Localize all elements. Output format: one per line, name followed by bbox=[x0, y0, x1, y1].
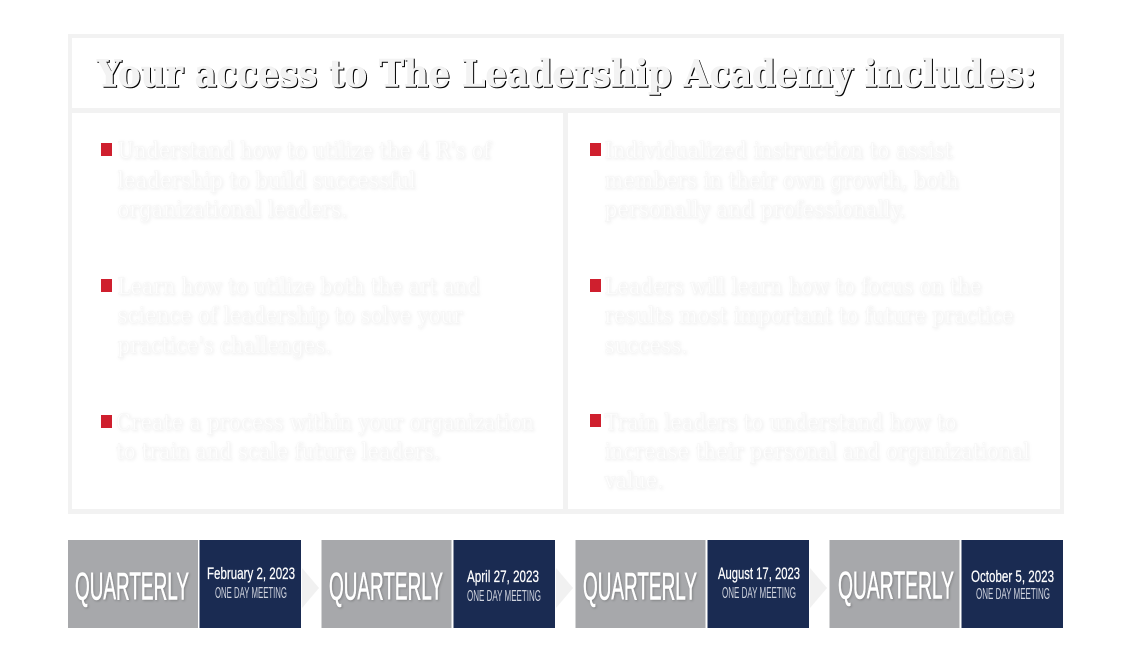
benefit: train and scale bbox=[101, 411, 534, 465]
benefit: individualized instruction bbox=[590, 139, 958, 223]
timeline: October meeting: October 5, 2023 bbox=[971, 568, 1054, 586]
timeline: August meeting: August 17, 2023 bbox=[718, 565, 800, 583]
benefit: art and science: Learn how to utilize both the art and bbox=[118, 275, 480, 300]
timeline: February meeting: February 2, 2023 bbox=[207, 565, 295, 583]
timeline: August meeting: QUARTERLY bbox=[583, 566, 697, 608]
timeline: October meeting bbox=[830, 540, 1063, 628]
benefit: individualized instruction: Individualized instruction to assist bbox=[604, 139, 953, 164]
benefit: increase value: Train leaders to understand how to bbox=[604, 411, 956, 436]
timeline: August meeting: ONE DAY MEETING bbox=[722, 585, 796, 602]
arrow bbox=[556, 568, 573, 608]
timeline: February meeting: QUARTERLY bbox=[75, 566, 189, 608]
benefit: train and scale: Create a process within your organization bbox=[116, 411, 534, 436]
benefit: individualized instruction: personally and professionally. bbox=[604, 198, 906, 223]
benefit: train and scale: to train and scale future leaders. bbox=[116, 440, 440, 465]
timeline: April meeting: ONE DAY MEETING bbox=[467, 588, 541, 605]
benefit: increase value: increase their personal and organizational bbox=[604, 440, 1030, 465]
benefit: art and science: science of leadership to solve your bbox=[118, 304, 463, 329]
benefit: focus on results: Leaders will learn how to focus on the bbox=[604, 275, 982, 300]
panel: right benefits bbox=[590, 139, 1030, 494]
title: Your access to The Leadership Academy includes: bbox=[96, 52, 1036, 96]
content frame bbox=[68, 34, 1064, 514]
benefit: art and science: practice's challenges. bbox=[118, 334, 332, 359]
timeline: February meeting: ONE DAY MEETING bbox=[215, 585, 287, 602]
timeline: April meeting bbox=[322, 540, 555, 628]
timeline: April meeting: April 27, 2023 bbox=[467, 568, 539, 586]
benefit: 4 R's: Understand how to utilize the 4 R's of bbox=[118, 139, 492, 164]
benefit: 4 R's: organizational leaders. bbox=[118, 198, 348, 223]
benefit: focus on results bbox=[590, 275, 1014, 359]
arrow bbox=[302, 568, 319, 608]
benefit: art and science bbox=[101, 275, 480, 359]
timeline: October meeting: ONE DAY MEETING bbox=[976, 586, 1050, 603]
panel: left benefits bbox=[101, 139, 534, 465]
timeline: August meeting bbox=[576, 540, 809, 628]
benefit: increase value: value. bbox=[604, 469, 664, 494]
benefit: individualized instruction: members in their own growth, both bbox=[604, 169, 958, 194]
benefit: focus on results: success. bbox=[604, 334, 688, 359]
benefit: focus on results: results most important to future practice bbox=[604, 304, 1014, 329]
timeline: February meeting bbox=[68, 540, 301, 628]
benefit: 4 R's: leadership to build successful bbox=[118, 169, 416, 194]
arrow bbox=[810, 568, 827, 608]
timeline: October meeting: QUARTERLY bbox=[838, 564, 954, 608]
benefit: increase value bbox=[590, 411, 1030, 494]
timeline: April meeting: QUARTERLY bbox=[329, 566, 443, 608]
benefit: 4 R's bbox=[101, 139, 492, 223]
